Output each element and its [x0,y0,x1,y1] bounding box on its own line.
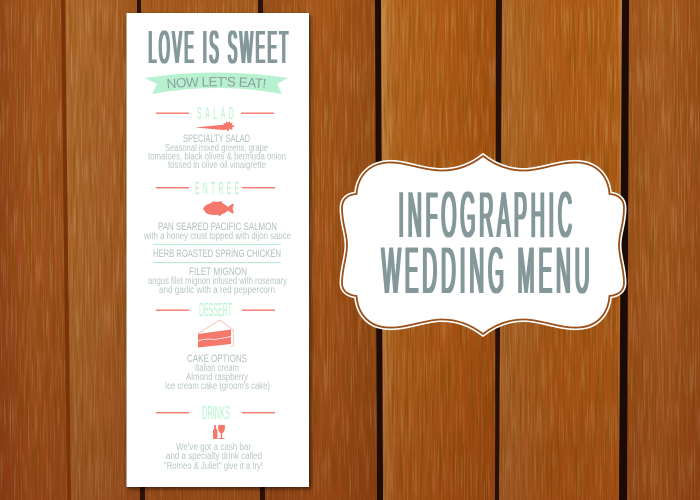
text: specialty salad [148,133,286,171]
ribbon banner [145,72,288,94]
text: specialty salad: tomatoes, black olives & bermuda onion [148,152,286,162]
text: filet mignon [148,266,287,296]
icon: cake slice [198,320,234,348]
text: drinks details: We've got a cash bar [176,442,252,453]
section: salad [148,103,286,171]
section: drinks: DRINKS [202,403,230,423]
section: dessert [156,300,275,392]
ribbon banner: NOW LET'S EAT! [167,76,266,88]
text: drinks details: and a specialty drink called [166,451,262,462]
menu card [125,12,314,492]
text: filet mignon: FILET MIGNON [189,266,247,278]
section: drinks [156,403,275,472]
text: cake options: CAKE OPTIONS [187,353,247,365]
bracket plaque [342,156,624,334]
text: chicken: HERB ROASTED SPRING CHICKEN [153,248,281,260]
text: salmon [143,221,291,242]
title: Love is Sweet: LOVE IS SWEET [148,22,288,74]
section: entree [143,178,291,296]
text: cake options: Ice cream cake (groom's cake) [165,381,270,392]
text: specialty salad: tossed in olive oil vinaigrette [168,160,266,171]
icon: bottle and wine glass [213,425,225,439]
icon: fish [203,201,234,216]
text: drinks details [164,442,263,472]
text: salmon: PAN SEARED PACIFIC SALMON [158,221,277,233]
heading: salad: SALAD [197,103,234,123]
icon: carrot [195,121,235,132]
text: specialty salad: SPECIALTY SALAD [183,133,250,145]
text: drinks details: "Romeo & Juliet" give it a try! [164,461,263,472]
text: specialty salad: Seasonal mixed greens, grape [165,143,268,154]
text: cake options: Italian cream [195,363,239,374]
text: salmon: with a honey crust topped with dijon sauce [143,231,291,242]
section: dessert: DESSERT [199,300,232,320]
text: cake options [165,353,270,392]
text: filet mignon: and garlic with a red peppercorn [159,285,275,296]
plaque title: WEDDING MENU [382,235,590,308]
heading: entree: ENTREE [195,178,239,198]
text: cake options: Almond raspberry [186,372,248,383]
plaque title: INFOGRAPHIC [398,180,572,252]
plaque title [382,180,590,308]
text: filet mignon: angus filet mignon infused with rosemary [148,276,287,287]
